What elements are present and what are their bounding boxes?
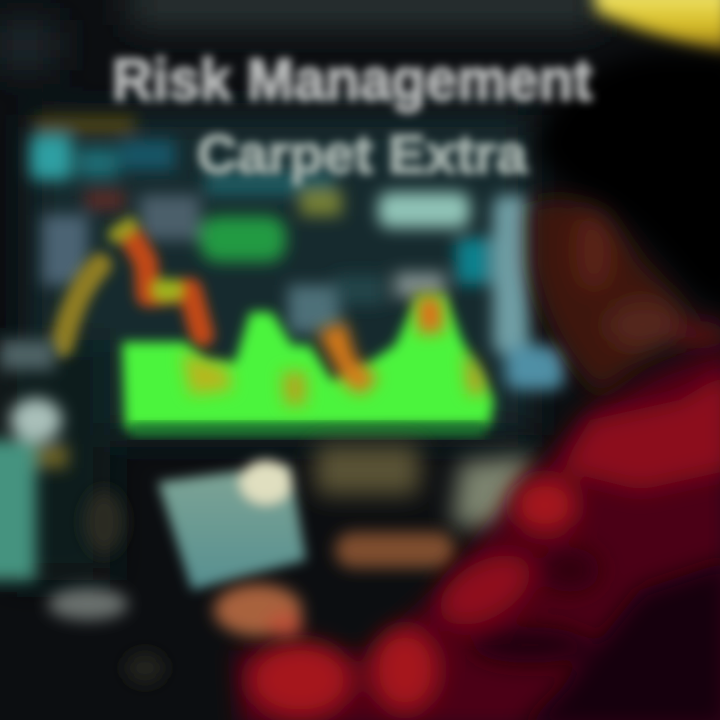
monitor upper band and screen backdrop (0, 0, 600, 580)
yellow lamp top right (592, 0, 720, 58)
monitor widgets (30, 118, 565, 390)
multicolour trend bands (62, 225, 202, 345)
person: red shirt highlights (248, 370, 720, 720)
tablet held in hand (158, 460, 306, 590)
left side panels (0, 340, 165, 684)
person: red shirt base (235, 345, 720, 720)
keyboard area (315, 445, 535, 530)
hand on keyboard (335, 532, 455, 568)
person: face (530, 199, 720, 395)
title (112, 47, 592, 185)
title: Risk Management (112, 47, 592, 113)
title: Carpet Extra (197, 123, 527, 185)
bar chart: green area with orange peaks (122, 295, 494, 436)
person: dark hair and head (535, 52, 720, 320)
person: forearm hand (214, 584, 303, 637)
